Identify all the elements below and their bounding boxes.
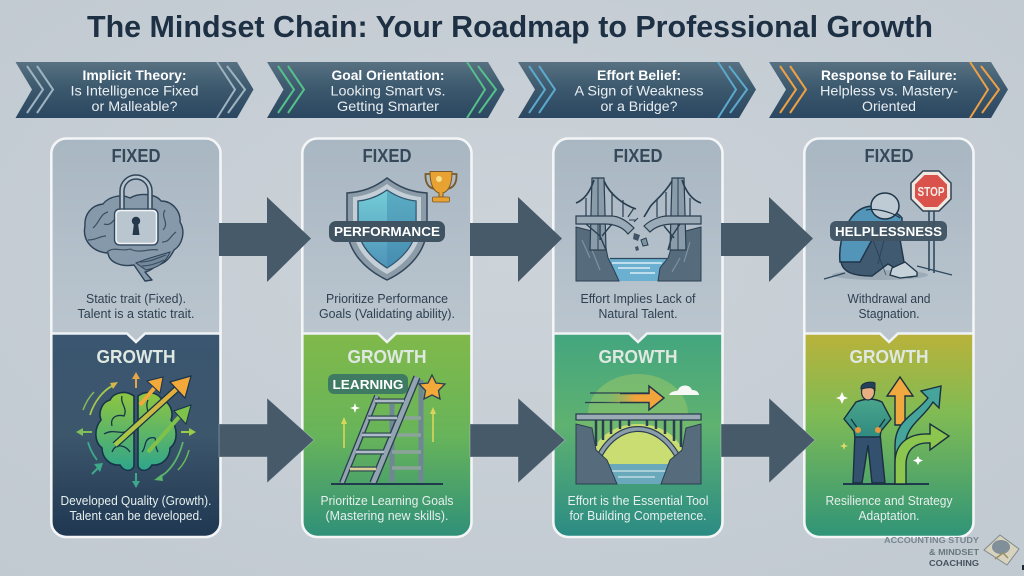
text: growth description <box>568 493 709 523</box>
banner: goal orientation: Getting Smarter <box>337 98 439 114</box>
banner: implicit theory: or Malleable? <box>92 98 178 114</box>
text: growth description <box>320 493 454 523</box>
text: growth description: for Building Competence. <box>570 508 706 523</box>
logo: accounting study and mindset coaching <box>884 535 1024 570</box>
text: growth description <box>826 493 953 523</box>
text: fixed description: Stagnation. <box>858 306 920 321</box>
heading: growth: GROWTH <box>850 346 928 367</box>
text: growth description: Talent can be developed. <box>70 508 202 523</box>
panel: effort belief column <box>553 138 722 537</box>
banner: goal orientation: Goal Orientation: <box>332 67 444 83</box>
text: growth description: Developed Quality (Growth). <box>60 493 212 508</box>
icon: growing brain <box>76 372 196 488</box>
icon: person with path arrows <box>836 377 949 484</box>
panel: response to failure column <box>804 138 974 537</box>
label: learning <box>328 374 408 394</box>
text: fixed description: Natural Talent. <box>598 306 678 321</box>
banner: response to failure: Response to Failure: <box>821 67 957 83</box>
icon: stop sign <box>911 171 951 273</box>
heading: fixed: FIXED <box>614 145 662 166</box>
text: fixed description: Effort Implies Lack of <box>580 291 696 306</box>
text: fixed description: Static trait (Fixed). <box>86 291 186 306</box>
icon: shield <box>347 178 427 280</box>
text: fixed description <box>848 291 930 321</box>
heading: fixed: FIXED <box>864 145 914 166</box>
text: fixed description: Prioritize Performance <box>326 291 448 306</box>
heading: fixed: FIXED <box>362 145 412 166</box>
label: learning: LEARNING <box>332 377 404 392</box>
label: helplessness: HELPLESSNESS <box>835 224 942 239</box>
text: fixed description: Talent is a static trait. <box>78 306 194 321</box>
heading: growth: GROWTH <box>96 346 176 367</box>
logo: accounting study and mindset coaching: COACHING <box>929 558 979 568</box>
arrow: bottom row 2 <box>470 398 565 483</box>
heading: growth: GROWTH <box>348 346 426 367</box>
icon: stop sign: STOP <box>918 184 945 199</box>
arrow: top row 1 <box>219 197 311 282</box>
banner: implicit theory <box>16 62 254 118</box>
text: fixed description <box>580 291 696 321</box>
text: growth description: Adaptation. <box>858 508 920 523</box>
banner: effort belief: A Sign of Weakness <box>574 82 704 98</box>
icon: complete bridge <box>576 374 701 484</box>
text: fixed description: Withdrawal and <box>848 291 930 306</box>
label: performance <box>329 221 445 242</box>
text: growth description: Resilience and Strategy <box>826 493 953 508</box>
title: The Mindset Chain: Your Roadmap to Professional Growth <box>87 9 933 44</box>
heading: fixed: FIXED <box>112 145 160 166</box>
text: fixed description <box>319 291 455 321</box>
banner: effort belief <box>518 62 756 118</box>
banner: response to failure: Helpless vs. Mastery- <box>820 82 958 98</box>
text: growth description: Effort is the Essential Tool <box>568 493 709 508</box>
banner: response to failure: Oriented <box>862 98 916 114</box>
label: helplessness <box>830 221 947 241</box>
banner: response to failure <box>769 62 1008 118</box>
icon: ladder with star <box>331 375 445 484</box>
banner: goal orientation <box>267 62 504 118</box>
text: growth description: Prioritize Learning Goals <box>320 493 454 508</box>
arrow: bottom row 1 <box>219 398 314 483</box>
arrow: top row 3 <box>721 197 813 282</box>
panel: goal orientation column <box>302 138 472 537</box>
panel: implicit theory column <box>51 138 220 537</box>
arrow: top row 2 <box>470 197 562 282</box>
text: fixed description <box>78 291 194 321</box>
icon: slumped person <box>824 193 952 280</box>
heading: growth: GROWTH <box>598 346 678 367</box>
label: performance: PERFORMANCE <box>334 224 440 239</box>
icon: broken bridge <box>576 178 701 281</box>
logo: accounting study and mindset coaching: ACCOUNTING STUDY <box>884 535 979 545</box>
text: growth description: (Mastering new skills). <box>326 508 448 523</box>
icon: trophy <box>425 172 457 202</box>
text: growth description <box>60 493 212 523</box>
arrow: bottom row 3 <box>721 398 815 483</box>
banner: goal orientation: Looking Smart vs. <box>330 82 446 98</box>
banner: effort belief: Effort Belief: <box>597 67 681 83</box>
banner: implicit theory: Is Intelligence Fixed <box>70 82 198 98</box>
banner: effort belief: or a Bridge? <box>600 98 678 114</box>
text: fixed description: Goals (Validating ability). <box>319 306 455 321</box>
logo: accounting study and mindset coaching: & MINDSET <box>929 547 980 557</box>
icon: locked brain <box>84 177 183 281</box>
banner: implicit theory: Implicit Theory: <box>82 67 186 83</box>
